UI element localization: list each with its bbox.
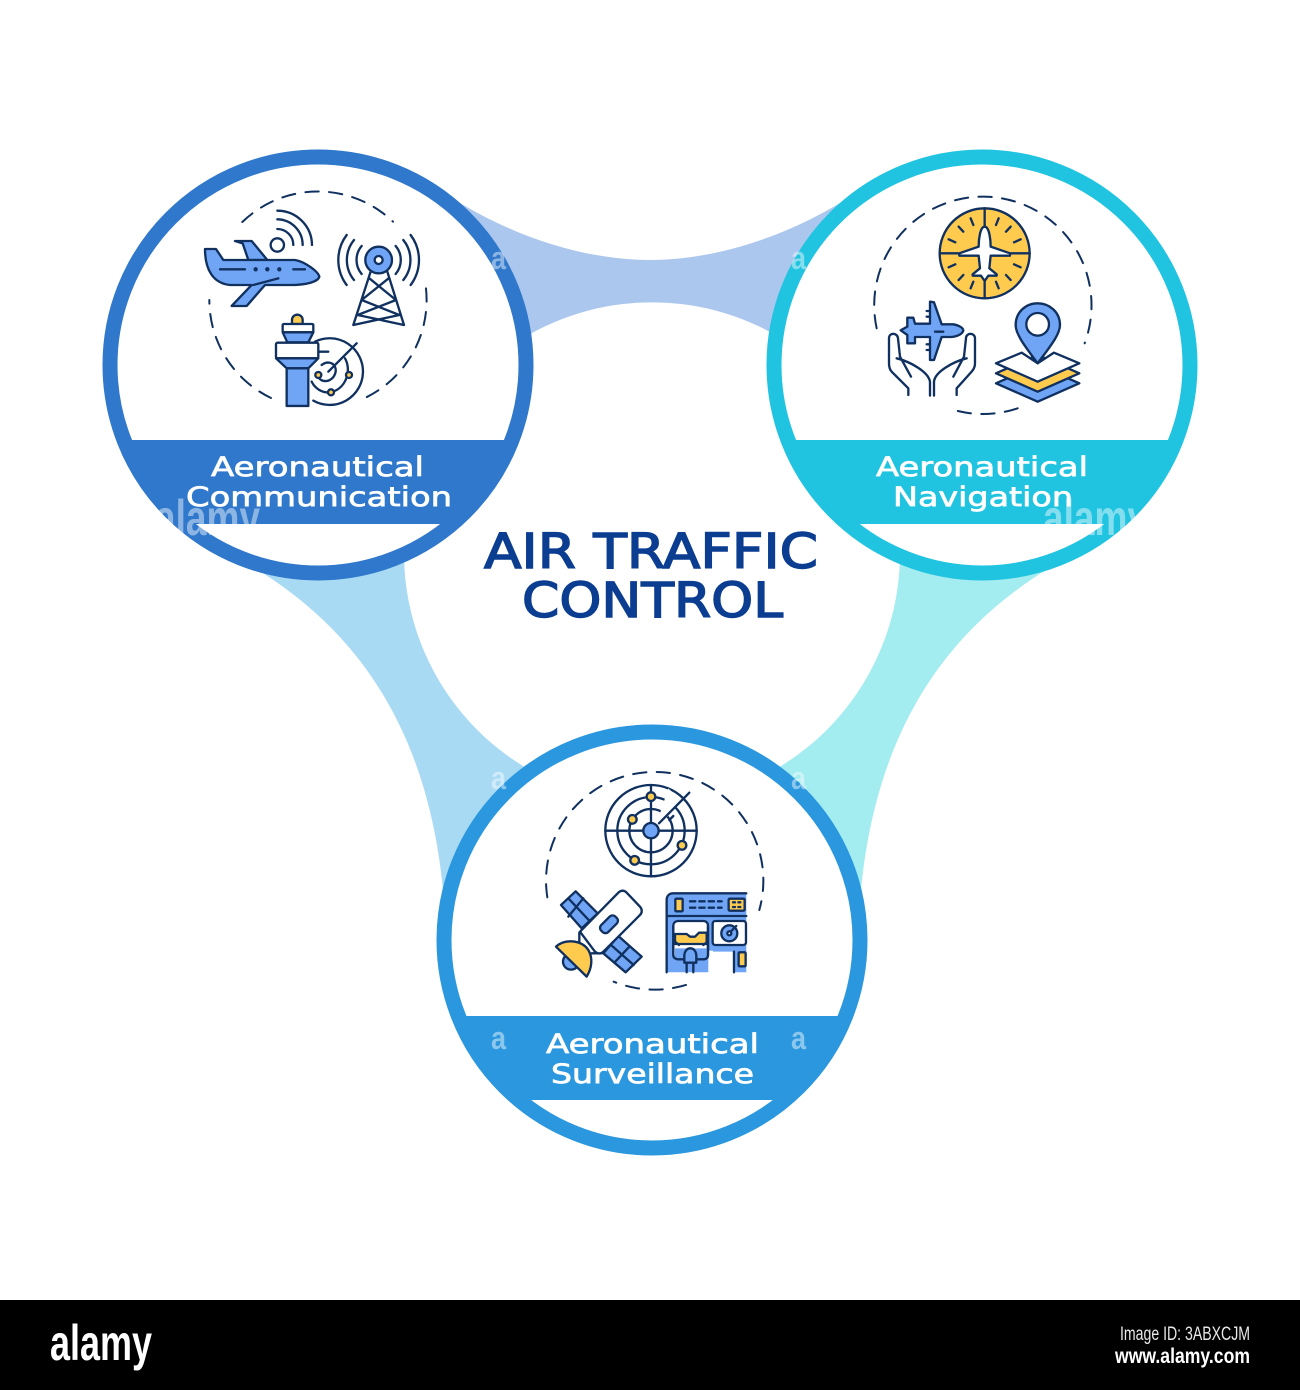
label: Aeronautical Communication [186, 452, 452, 513]
watermark fragments [155, 240, 1148, 1056]
watermark fragments: alamy [1043, 490, 1148, 546]
panel: Aeronautical Surveillance [434, 732, 874, 1148]
label: Aeronautical Surveillance: Aeronautical [546, 1029, 759, 1060]
label: Aeronautical Surveillance: Surveillance [551, 1059, 754, 1090]
icon group: radar, satellite and console [546, 772, 763, 990]
footer bar [0, 1300, 1300, 1390]
panel: Aeronautical Navigation [764, 157, 1204, 573]
footer logo: alamy [50, 1315, 152, 1371]
icon: airplane with signal [205, 211, 319, 306]
connector: communication to surveillance [258, 555, 530, 890]
icon: satellite [556, 891, 642, 977]
label: Aeronautical Surveillance [546, 1029, 759, 1090]
icon: control console [667, 893, 746, 972]
watermark fragments: a [791, 760, 806, 796]
watermark fragments: a [491, 240, 506, 276]
icon: map pin on layers [996, 303, 1079, 402]
watermark fragments: alamy [155, 490, 260, 546]
watermark fragments: a [791, 1020, 806, 1056]
watermark fragments: a [491, 1020, 506, 1056]
connector: communication to navigation [455, 200, 845, 340]
title: CONTROL [522, 573, 783, 629]
icon group: compass, hands and map pin [874, 197, 1092, 414]
icon group: plane, antenna and tower [205, 191, 427, 406]
label: Aeronautical Communication: Communication [186, 482, 452, 513]
title: AIR TRAFFIC [484, 524, 818, 580]
title [484, 524, 818, 629]
icon: control tower and radar [276, 315, 363, 406]
connector: navigation to surveillance [774, 555, 1046, 890]
label: Aeronautical Communication: Aeronautical [211, 452, 424, 483]
footer url: www.alamy.com [1114, 1345, 1250, 1368]
footer image id: Image ID: 3ABXCJM [1120, 1324, 1250, 1345]
watermark fragments: a [791, 240, 806, 276]
label: Aeronautical Navigation: Aeronautical [876, 452, 1088, 483]
icon: compass with plane [940, 208, 1030, 298]
label: Aeronautical Navigation [876, 452, 1088, 513]
watermark fragments: a [491, 760, 506, 796]
panel: Aeronautical Communication [100, 157, 540, 573]
icon: radio tower [338, 235, 419, 325]
icon: plane in hands [889, 302, 975, 396]
label: Aeronautical Navigation: Navigation [893, 482, 1073, 513]
icon: radar scope [605, 785, 697, 876]
